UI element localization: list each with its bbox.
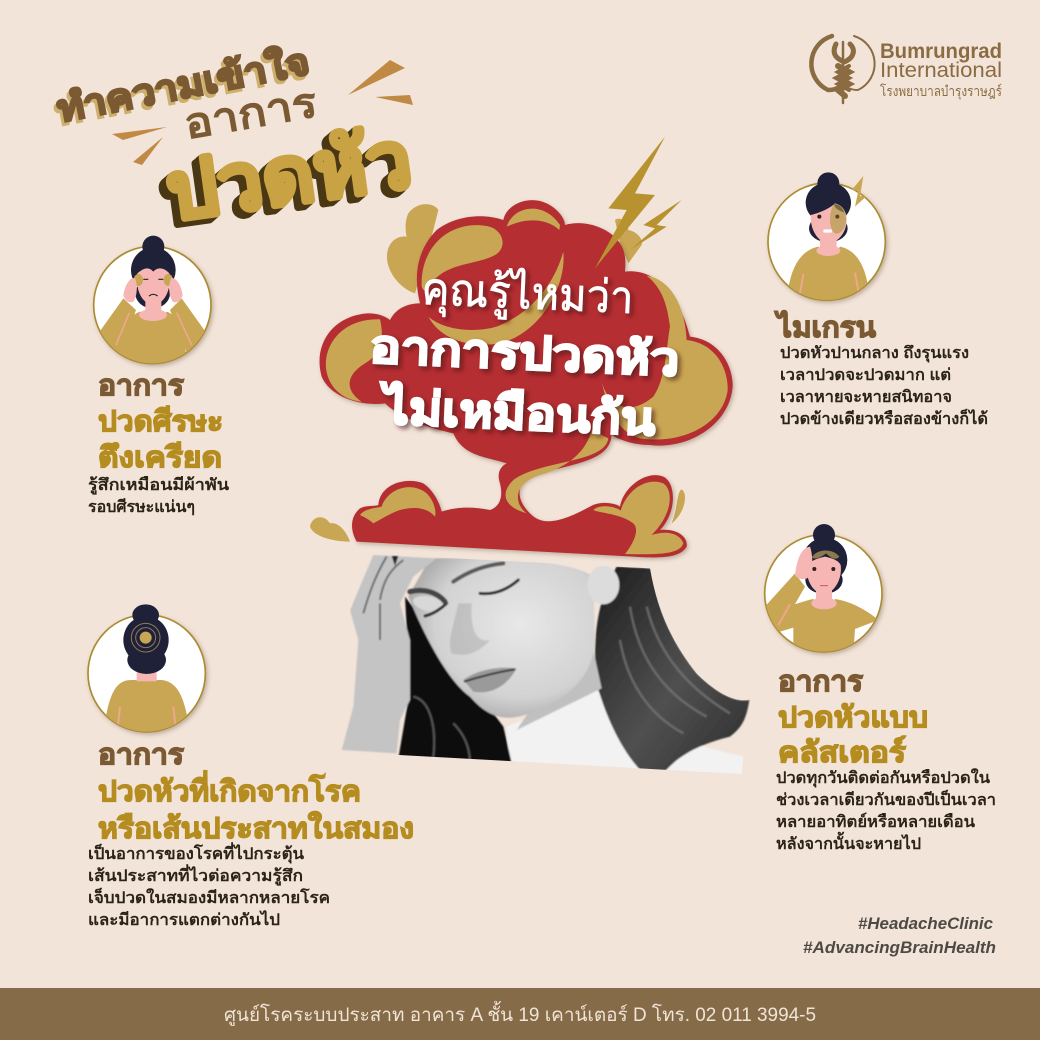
- body text: [88, 842, 330, 929]
- heading: symptom: อาการ: [98, 739, 184, 771]
- logo wordmark: Bumrungrad: [880, 40, 1002, 63]
- body text: เวลาปวดจะปวดมาก แต่: [780, 367, 951, 384]
- nose: [450, 603, 490, 655]
- title line: headache 3D: ปวดหัว: [156, 119, 412, 241]
- hashtags: #HeadacheClinic: [858, 914, 994, 933]
- explosion cloud: [310, 137, 733, 557]
- title line: headache 3D: ปวดหัว: [161, 114, 417, 237]
- turtleneck: [507, 690, 743, 777]
- heading: migraine: ไมเกรน: [774, 310, 876, 344]
- card: cluster headache: [760, 524, 996, 853]
- hair left: [398, 597, 513, 770]
- body text: และมีอาการแตกต่างกันไป: [88, 910, 280, 929]
- body text: [88, 475, 229, 516]
- body text: รอบศีรษะแน่นๆ: [88, 497, 195, 516]
- logo thai name: โรงพยาบาลบำรุงราษฎร์: [880, 83, 1002, 100]
- heading: disease: ปวดหัวที่เกิดจากโรค: [98, 770, 361, 808]
- title line: symptom: อาการ: [180, 78, 321, 148]
- body text: หลายอาทิตย์หรือหลายเดือน: [776, 812, 975, 831]
- body text: ปวดข้างเดียวหรือสองข้างก็ได้: [780, 407, 988, 428]
- lips: [463, 668, 517, 692]
- neck: [517, 650, 602, 730]
- heading: symptom: อาการ: [778, 666, 863, 698]
- card: migraine: [768, 172, 988, 428]
- ear: [587, 566, 619, 604]
- card: tension headache: [88, 236, 229, 516]
- heading: cluster line 2: คลัสเตอร์: [778, 735, 906, 769]
- logo: [811, 36, 1002, 103]
- logo international: International: [880, 59, 1002, 82]
- body text: [776, 768, 996, 853]
- body text: ปวดหัวปานกลาง ถึงรุนแรง: [780, 344, 969, 363]
- body text: รู้สึกเหมือนมีผ้าพัน: [88, 475, 229, 496]
- main title: [50, 39, 418, 243]
- hashtags: [803, 914, 996, 957]
- avatar: hand over eye: [760, 524, 882, 655]
- body text: [780, 344, 988, 428]
- red cloud shape: [320, 200, 733, 557]
- headline line 2: อาการปวดหัว: [369, 320, 681, 386]
- heading: tension: ปวดศีรษะ: [98, 406, 223, 438]
- card: secondary headache: [88, 604, 414, 929]
- footer contact text: ศูนย์โรคระบบประสาท อาคาร A ชั้น 19 เคาน์เตอร์ D โทร. 02 011 3994-5: [224, 1001, 816, 1026]
- hand: [342, 555, 437, 753]
- left eyelid: [412, 596, 438, 612]
- hashtags: #AdvancingBrainHealth: [803, 938, 996, 957]
- body text: หลังจากนั้นจะหายไป: [776, 831, 921, 853]
- lightning bolts: [595, 137, 682, 268]
- gold back puffs: [310, 204, 685, 542]
- heading: nerve: หรือเส้นประสาทในสมอง: [98, 811, 414, 845]
- fingers: [363, 557, 403, 640]
- cloud headline: [369, 263, 681, 445]
- gold inner swirls: [326, 209, 728, 554]
- body text: ปวดทุกวันติดต่อกันหรือปวดใน: [776, 768, 990, 788]
- photo: woman with headache: [342, 555, 749, 777]
- body text: เวลาหายจะหายสนิทอาจ: [780, 388, 952, 406]
- title line: headache 3D: ปวดหัว: [159, 116, 415, 238]
- headline line 1: คุณรู้ไหมว่า: [420, 263, 635, 325]
- avatar: hands on temples: [94, 236, 211, 370]
- title line: understanding: ทำความเข้าใจ: [53, 39, 313, 130]
- body text: เป็นอาการของโรคที่ไปกระตุ้น: [88, 842, 304, 864]
- title line: headache 3D: ปวดหัว: [157, 117, 413, 240]
- title line: understanding: ทำความเข้าใจ: [51, 42, 310, 133]
- hair streaks: [620, 607, 730, 733]
- headline line 3: ไม่เหมือนกัน: [377, 381, 657, 445]
- body text: ช่วงเวลาเดียวกันของปีเป็นเวลา: [776, 788, 996, 809]
- brows and eyes: [410, 563, 518, 616]
- title line: headache 3D: ปวดหัว: [154, 121, 410, 243]
- logo emblem: [811, 36, 875, 103]
- burst accents: [112, 60, 413, 165]
- hair right: [595, 567, 749, 773]
- body text: เจ็บปวดในสมองมีหลากหลายโรค: [88, 886, 330, 907]
- body text: เส้นประสาทที่ไวต่อความรู้สึก: [88, 864, 303, 887]
- heading: cluster: ปวดหัวแบบ: [778, 702, 928, 734]
- heading: symptom: อาการ: [98, 370, 184, 402]
- face: [408, 558, 595, 718]
- heading: tension line 2: ตึงเครียด: [98, 442, 222, 474]
- avatar: half-face pain: [768, 172, 885, 307]
- footer bar: [0, 988, 1040, 1040]
- avatar: back of head: [88, 604, 205, 735]
